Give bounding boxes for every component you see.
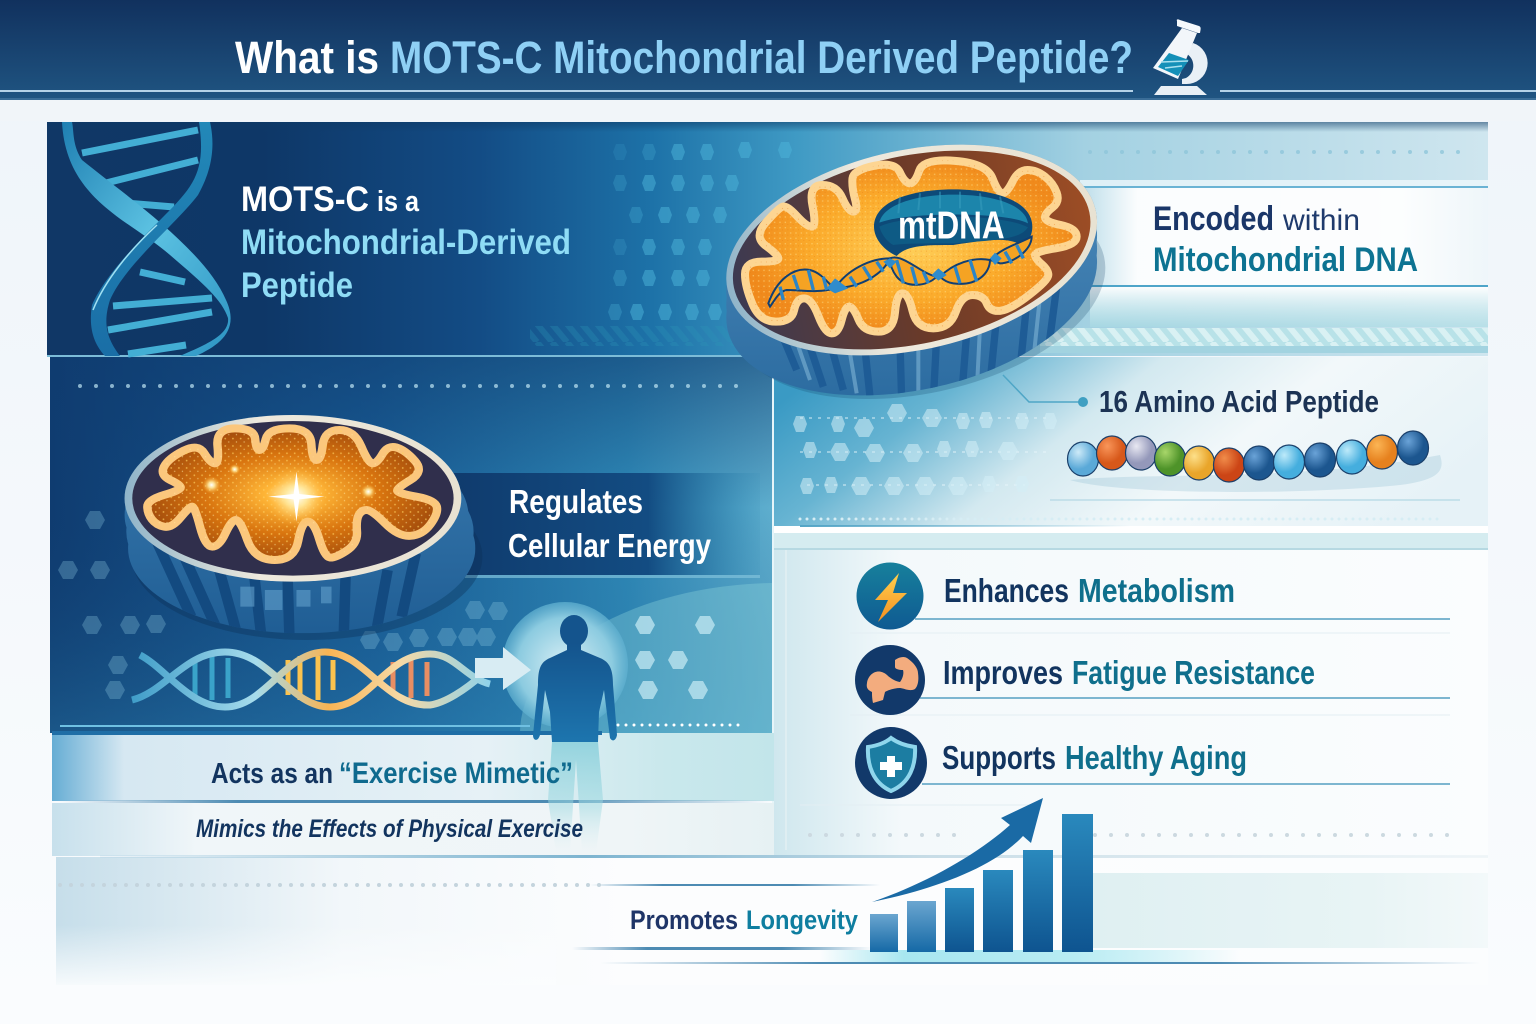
text: MOTS-C definition: is a bbox=[377, 186, 420, 218]
icon: shield with plus bbox=[868, 738, 915, 791]
callout: exercise mimetic: Acts as an bbox=[211, 758, 333, 790]
panel: right lower background bbox=[774, 550, 1488, 856]
benefit: supports healthy aging: Supports bbox=[942, 739, 1056, 776]
peptide bead chain bbox=[1068, 431, 1442, 492]
halo behind body bbox=[502, 602, 628, 728]
icon: glowing DNA helix bbox=[132, 652, 490, 707]
decorative hexagons and dots bbox=[58, 142, 1488, 885]
text: MOTS-C definition: Mitochondrial-Derived bbox=[241, 223, 571, 262]
callout: encoded band: Encoded bbox=[1153, 200, 1274, 238]
benefit: enhances metabolism bbox=[856, 562, 1450, 630]
header band bbox=[0, 0, 1536, 121]
icon: DNA helix top left bbox=[62, 122, 231, 356]
callout: regulates cellular energy band: Regulates bbox=[509, 483, 643, 520]
benefit: enhances metabolism: Metabolism bbox=[1078, 572, 1235, 609]
callout: exercise mimetic bbox=[211, 757, 573, 790]
callout: encoded band bbox=[1060, 180, 1488, 327]
benefit: supports healthy aging bbox=[855, 727, 1450, 799]
text: promotes longevity: Longevity bbox=[746, 905, 858, 935]
panel: intro band bbox=[47, 122, 1488, 357]
mtDNA helix bbox=[768, 237, 1032, 307]
icon: flexed arm bbox=[867, 657, 918, 703]
text: promotes longevity bbox=[630, 905, 858, 935]
title: MOTS-C Mitochondrial Derived Peptide? bbox=[390, 32, 1133, 83]
bar chart: longevity growth bbox=[870, 798, 1093, 952]
callout: encoded band: Mitochondrial DNA bbox=[1153, 241, 1418, 279]
panel: lower left pale background bbox=[52, 731, 774, 856]
title: What is bbox=[235, 32, 379, 83]
arrow: upward trend bbox=[872, 798, 1043, 902]
text: MOTS-C definition: MOTS-C bbox=[241, 180, 369, 219]
text: MOTS-C definition: Peptide bbox=[241, 266, 353, 305]
callout: 16 amino acid peptide bbox=[1003, 375, 1379, 419]
panel: right middle background bbox=[772, 357, 1488, 852]
panel: bottom background bbox=[56, 855, 1488, 985]
callout: exercise mimetic: “Exercise Mimetic” bbox=[339, 757, 573, 790]
icon: microscope bbox=[1153, 19, 1208, 95]
callout: regulates cellular energy band bbox=[440, 473, 760, 578]
callout: regulates cellular energy band: Cellular Energy bbox=[508, 527, 712, 564]
benefit: supports healthy aging: Healthy Aging bbox=[1065, 739, 1247, 776]
benefit: improves fatigue resistance bbox=[855, 645, 1450, 715]
panel: lower left background bbox=[50, 357, 772, 733]
benefit: improves fatigue resistance: Improves bbox=[943, 654, 1063, 691]
benefit: enhances metabolism: Enhances bbox=[944, 572, 1069, 609]
mitochondrion glowing bbox=[124, 415, 482, 640]
icon: lightning bolt bbox=[875, 573, 907, 622]
text: promotes longevity: Promotes bbox=[630, 905, 738, 935]
mtDNA ring: mtDNA bbox=[898, 203, 1005, 247]
benefit: improves fatigue resistance: Fatigue Resistance bbox=[1072, 654, 1315, 691]
illustration: human body silhouette bbox=[533, 615, 617, 852]
callout: encoded band: within bbox=[1282, 204, 1360, 237]
text: MOTS-C definition bbox=[241, 180, 571, 305]
mtDNA ring bbox=[874, 189, 1032, 256]
arrow bbox=[475, 647, 531, 690]
callout: 16 amino acid peptide: 16 Amino Acid Peptide bbox=[1099, 384, 1379, 419]
text: mimics: Mimics the Effects of Physical Exercise bbox=[196, 815, 583, 843]
mitochondrion with mtDNA bbox=[726, 144, 1106, 399]
